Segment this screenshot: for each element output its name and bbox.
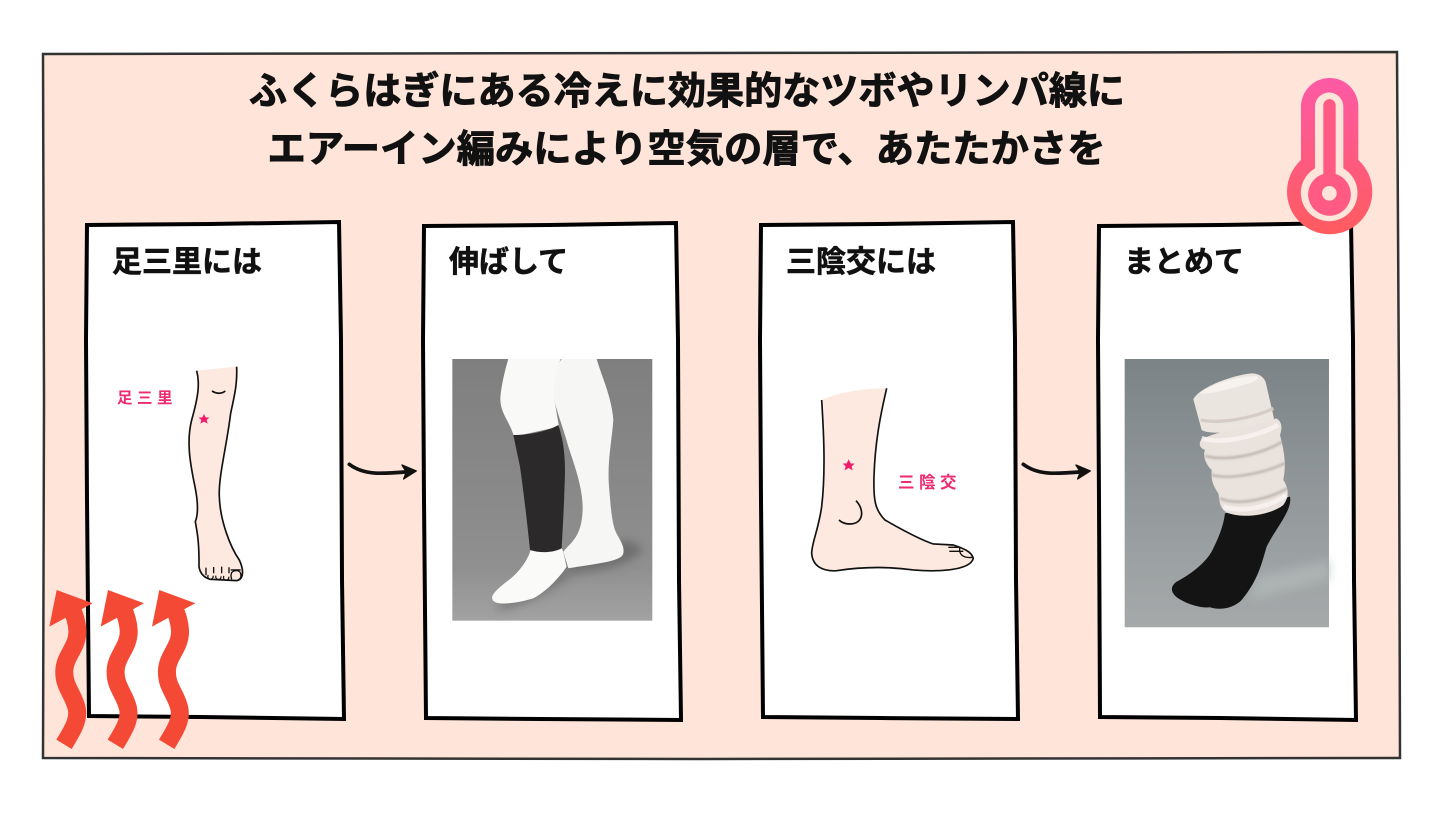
heat arrow 1 xyxy=(49,590,93,744)
icon: rising heat arrows xyxy=(49,590,195,744)
heading: まとめて: まとめて xyxy=(1124,246,1244,279)
panel: 足三里 xyxy=(86,222,344,719)
title: エアーイン編みにより空気の層で、あたたかさを xyxy=(268,129,1106,171)
title: ふくらはぎにある冷えに効果的なツボやリンパ線に xyxy=(249,71,1125,113)
panel: 伸ばして xyxy=(423,223,681,720)
icon: ankle illustration xyxy=(812,388,973,571)
photo: cream leg warmer and black toe sock xyxy=(1125,359,1329,627)
heat arrow 3 xyxy=(152,590,195,744)
label: 三陰交: 三陰交 xyxy=(898,473,961,492)
photo: black leg warmer on mannequin xyxy=(452,359,652,621)
heat arrow 2 xyxy=(101,590,144,744)
panel: 三陰交 xyxy=(760,222,1018,719)
icon: thermometer xyxy=(1287,78,1372,234)
icon: leg illustration xyxy=(189,367,243,581)
label: 足三里: 足三里 xyxy=(117,390,177,407)
arrow: step 1 to step 2 xyxy=(349,464,416,479)
heading: 三陰交には: 三陰交には xyxy=(786,246,936,279)
arrow: step 3 to step 4 xyxy=(1023,464,1090,479)
panel: まとめて xyxy=(1098,223,1356,720)
title xyxy=(249,71,1125,171)
heading: 伸ばして: 伸ばして xyxy=(449,246,568,279)
heading: 足三里には: 足三里には xyxy=(112,246,262,279)
